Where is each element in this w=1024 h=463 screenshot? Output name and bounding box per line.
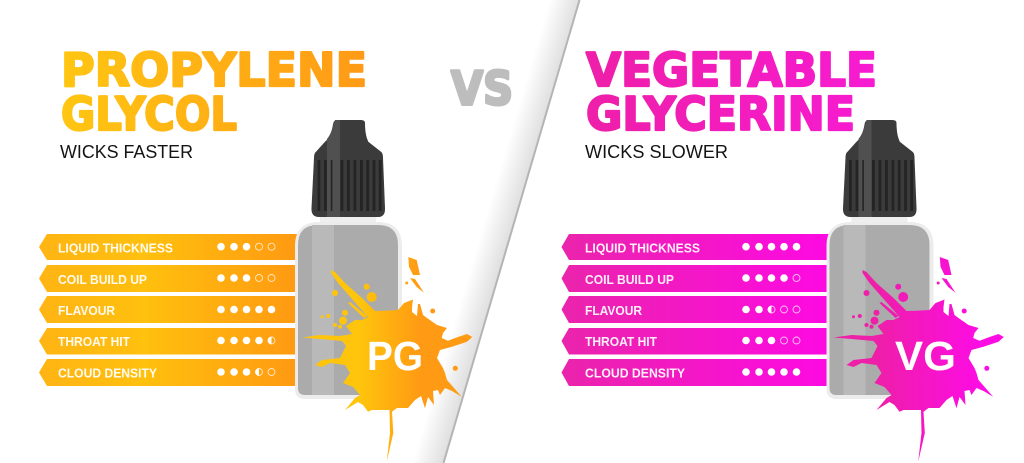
icon: pg splat	[302, 257, 472, 462]
panel: vg ratings	[562, 234, 830, 386]
heading: vegetable glycerine	[586, 43, 877, 141]
diagonal divider with shadow	[413, 0, 580, 463]
rating: vg throat hit: THROAT HIT	[585, 334, 657, 349]
panel: pg ratings	[39, 234, 300, 386]
rating: pg cloud density	[39, 359, 300, 386]
rating: vg flavour	[562, 296, 830, 323]
heading: propylene glycol: PROPYLENE	[61, 43, 367, 97]
rating: pg coil build up: COIL BUILD UP	[58, 272, 147, 287]
rating: vg coil build up	[562, 265, 830, 292]
rating: vg liquid thickness	[562, 234, 830, 260]
rating: vg flavour: FLAVOUR	[585, 303, 643, 318]
icon: vg splat	[834, 257, 1004, 462]
vs label: VS	[451, 62, 513, 116]
rating: vg liquid thickness: LIQUID THICKNESS	[585, 240, 700, 256]
heading: propylene glycol: GLYCOL	[61, 87, 237, 141]
rating: pg throat hit: THROAT HIT	[58, 334, 130, 349]
rating: pg liquid thickness: LIQUID THICKNESS	[58, 240, 173, 256]
rating: vg throat hit	[562, 328, 830, 354]
subheading: wicks slower: WICKS SLOWER	[585, 141, 728, 162]
icon: vg bottle	[826, 120, 934, 399]
rating: pg cloud density: CLOUD DENSITY	[58, 366, 157, 380]
heading: propylene glycol	[61, 43, 367, 141]
icon: pg bottle	[295, 120, 402, 399]
rating: vg cloud density	[562, 359, 830, 386]
rating: pg coil build up	[39, 265, 300, 292]
subheading: wicks faster: WICKS FASTER	[60, 141, 193, 162]
rating: pg flavour: FLAVOUR	[58, 303, 116, 318]
rating: vg coil build up: COIL BUILD UP	[585, 272, 674, 287]
heading: vegetable glycerine: GLYCERINE	[586, 87, 855, 141]
rating: vg cloud density: CLOUD DENSITY	[585, 366, 685, 380]
vg badge label: VG	[895, 333, 956, 379]
rating: pg liquid thickness	[39, 234, 300, 260]
rating: pg throat hit	[39, 328, 300, 354]
rating: pg flavour	[39, 296, 300, 323]
pg badge label: PG	[367, 333, 423, 379]
heading: vegetable glycerine: VEGETABLE	[586, 43, 877, 97]
